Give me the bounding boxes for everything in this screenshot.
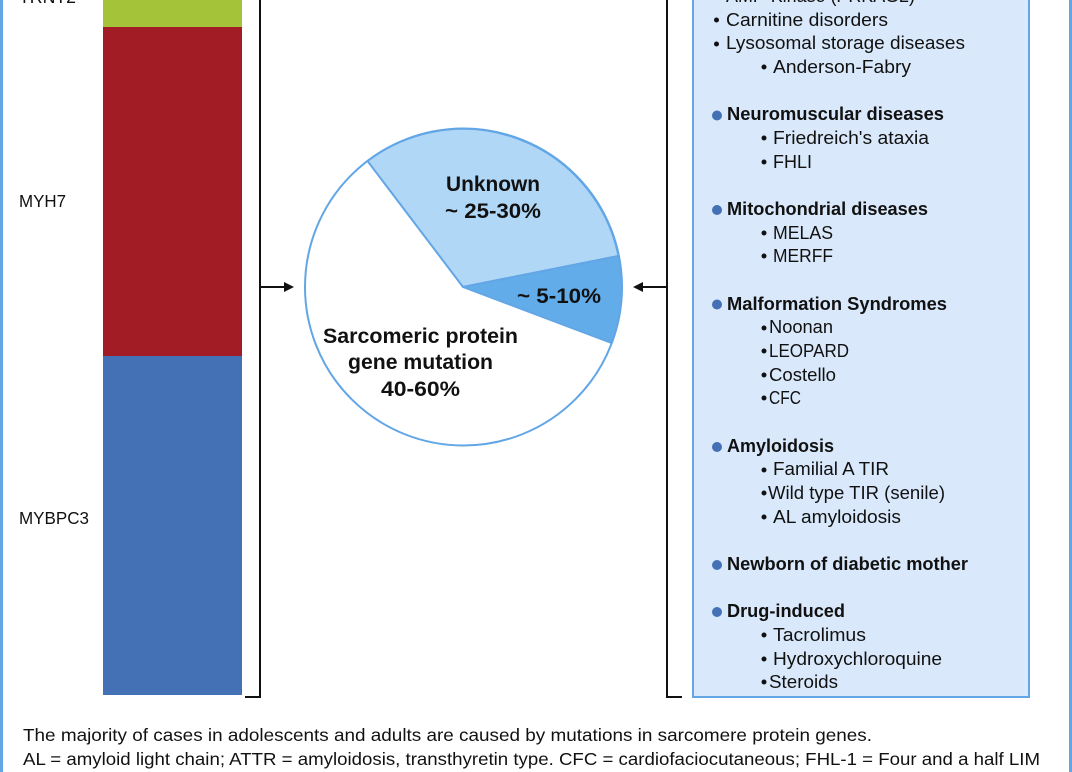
group: amyloidosis: Amyloidosis bbox=[727, 435, 834, 456]
right bracket and arrow bbox=[633, 0, 682, 697]
pie label: sarcomeric: gene mutation bbox=[348, 350, 493, 374]
pie chart bbox=[305, 128, 622, 446]
footnote bbox=[23, 725, 1040, 769]
group: drug-induced: Hydroxychloroquine bbox=[773, 648, 942, 669]
group: neuromuscular diseases: Friedreich's ataxia bbox=[773, 127, 930, 148]
group: newborn of diabetic mother: Newborn of diabetic mother bbox=[727, 553, 968, 574]
group: drug-induced: Tacrolimus bbox=[773, 624, 866, 645]
pie label: sarcomeric: 40-60% bbox=[381, 377, 460, 401]
pie label: unknown bbox=[445, 172, 541, 223]
group: amyloidosis bbox=[712, 435, 945, 527]
gene labels: MYBPC3 bbox=[19, 508, 89, 528]
group: malformation syndromes: LEOPARD bbox=[769, 340, 849, 361]
group: mitochondrial diseases: Mitochondrial diseases bbox=[727, 198, 928, 219]
group: amyloidosis: Familial A TIR bbox=[773, 458, 889, 479]
gene labels bbox=[19, 0, 89, 528]
pie label: unknown: Unknown bbox=[446, 172, 540, 196]
group: amyloidosis: AL amyloidosis bbox=[773, 506, 901, 527]
pie label: unknown: ~ 25-30% bbox=[445, 199, 541, 223]
group: storage diseases: Carnitine disorders bbox=[726, 9, 888, 30]
footnote: AL = amyloid light chain; ATTR = amyloidosis, transthyretin type. CFC = cardiofaciocutaneous; FHL-1 = Four and a half LIM bbox=[23, 749, 1040, 769]
group: mitochondrial diseases bbox=[712, 198, 928, 266]
pie label: other: ~ 5-10% bbox=[517, 284, 601, 308]
stacked bar: sarcomeric genes bbox=[103, 0, 242, 695]
left bracket and arrow bbox=[245, 0, 294, 697]
group: malformation syndromes: Noonan bbox=[769, 316, 833, 337]
group: drug-induced: Steroids bbox=[769, 671, 838, 692]
group: malformation syndromes bbox=[712, 293, 947, 408]
group: storage diseases bbox=[714, 0, 965, 77]
group: malformation syndromes: Malformation Syndromes bbox=[727, 293, 947, 314]
group: amyloidosis: Wild type TIR (senile) bbox=[768, 482, 945, 503]
group: mitochondrial diseases: MELAS bbox=[773, 222, 833, 243]
group: neuromuscular diseases bbox=[712, 103, 944, 172]
footnote: The majority of cases in adolescents and adults are caused by mutations in sarcomere protein genes. bbox=[23, 725, 872, 745]
group: mitochondrial diseases: MERFF bbox=[773, 245, 833, 266]
group: drug-induced: Drug-induced bbox=[727, 600, 845, 621]
group: storage diseases: Anderson-Fabry bbox=[773, 56, 912, 77]
panel: other causes bbox=[693, 0, 1029, 697]
gene labels: MYH7 bbox=[19, 191, 66, 211]
group: neuromuscular diseases: FHLI bbox=[773, 151, 812, 172]
group: neuromuscular diseases: Neuromuscular diseases bbox=[727, 103, 944, 124]
pie label: sarcomeric: Sarcomeric protein bbox=[323, 324, 518, 348]
pie label: sarcomeric bbox=[323, 324, 518, 401]
group: malformation syndromes: CFC bbox=[769, 387, 801, 408]
group: drug-induced bbox=[712, 600, 942, 692]
group: storage diseases: Lysosomal storage diseases bbox=[726, 32, 965, 53]
group: malformation syndromes: Costello bbox=[769, 364, 836, 385]
